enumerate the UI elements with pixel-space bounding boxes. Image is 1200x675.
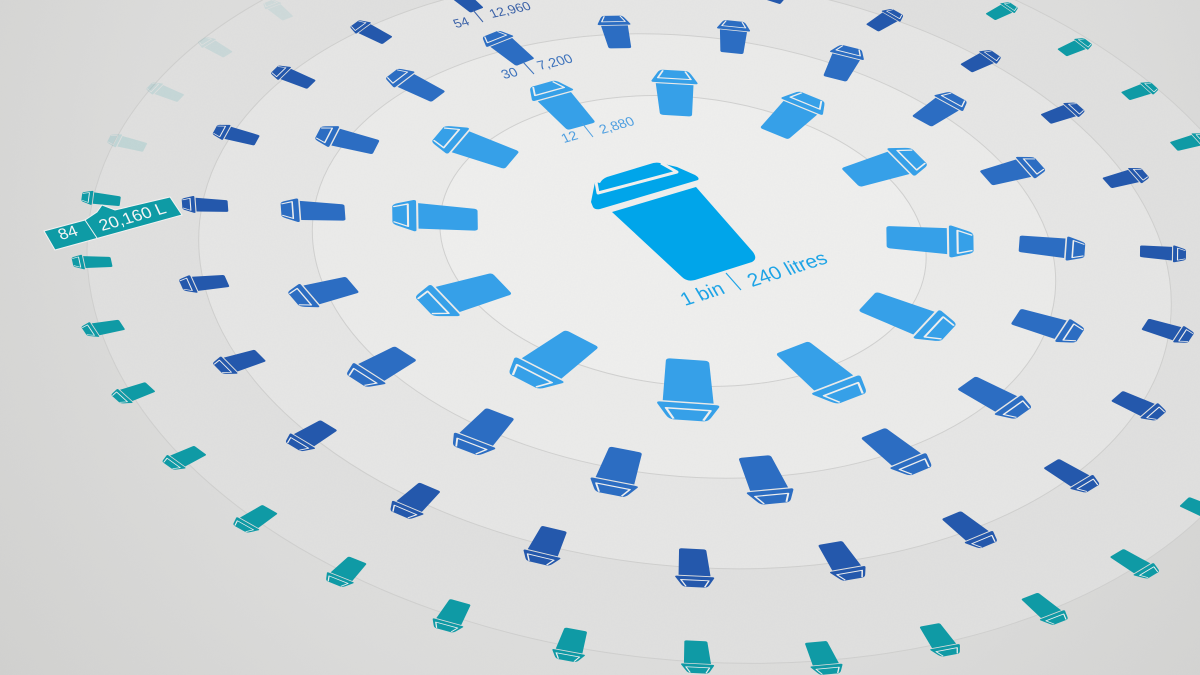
bin: [1177, 495, 1200, 525]
bin: [1008, 305, 1088, 347]
bin: [477, 28, 539, 68]
text: 12: 12: [558, 128, 580, 146]
faded bin: [106, 132, 148, 154]
text: 7,200: 7,200: [534, 51, 576, 73]
text: 240 litres: 240 litres: [743, 248, 832, 291]
bin: [409, 268, 517, 322]
bin: [1100, 165, 1152, 191]
ring 1 label: 12, 2,880: [558, 114, 637, 146]
bin: [656, 357, 720, 423]
bin: [957, 48, 1005, 74]
bin: [837, 143, 933, 191]
bin: [907, 89, 973, 129]
bin: [1055, 36, 1095, 58]
bin: [976, 153, 1050, 189]
bin: [1017, 591, 1073, 627]
text: 30: 30: [498, 65, 521, 82]
bin: [268, 63, 318, 91]
bin: [108, 380, 158, 406]
bin: [384, 480, 446, 522]
bin: [392, 199, 478, 235]
disc: ring 2: [290, 0, 1078, 514]
bin: [81, 190, 121, 208]
text: 84: 84: [55, 223, 81, 244]
bin: [762, 0, 798, 5]
divider: [523, 62, 534, 74]
central bin lid: [591, 163, 699, 209]
bin: [715, 19, 751, 55]
bin: [1140, 243, 1186, 263]
faded bin: [260, 0, 296, 22]
bin: [753, 88, 833, 142]
bin: [1108, 389, 1170, 423]
ring 2 label: 30, 7,200: [498, 51, 576, 82]
text: 54: 54: [450, 14, 472, 31]
disc: ring 3: [169, 0, 1200, 615]
bin: [863, 7, 907, 33]
bin: [71, 255, 113, 269]
divider: [582, 123, 593, 137]
bin: [347, 18, 395, 46]
central bin lid line: [596, 163, 677, 193]
bin: [159, 444, 209, 472]
bin: [953, 373, 1037, 423]
bin: [768, 338, 876, 408]
text: 2,880: 2,880: [596, 114, 637, 137]
bin: [679, 640, 715, 674]
bin: [1040, 457, 1104, 495]
bin: [673, 548, 715, 588]
bin: [550, 626, 592, 664]
bin: [209, 347, 269, 377]
bin: [281, 418, 341, 454]
bin: [522, 78, 602, 132]
divider: [85, 220, 97, 238]
bin: [818, 43, 868, 83]
bin: [313, 122, 381, 158]
bin: [587, 445, 649, 499]
bin: [499, 326, 607, 394]
central bin body: [612, 187, 755, 281]
tag shape: [44, 197, 182, 250]
bin: [229, 503, 281, 535]
bin: [596, 15, 636, 49]
bin: [443, 0, 487, 14]
bin: [280, 198, 346, 224]
bin: [855, 425, 939, 479]
bin: [886, 221, 974, 259]
bin: [800, 640, 846, 675]
central label: 1 bin, 240 litres: [676, 248, 832, 310]
faded bin: [144, 80, 186, 104]
bin: [211, 122, 261, 148]
text: 20,160 L: 20,160 L: [96, 199, 169, 235]
bin: [1018, 232, 1086, 262]
bin: [812, 540, 872, 582]
bin: [915, 622, 965, 658]
bin: [519, 524, 573, 568]
bin: [937, 509, 1003, 551]
bin: [445, 405, 521, 459]
bin: [340, 343, 422, 391]
bin: [1168, 131, 1200, 153]
divider: [726, 273, 741, 290]
bin: [1140, 316, 1196, 346]
bin: [983, 0, 1021, 22]
bin: [284, 273, 362, 311]
ring 3: dark blue bins, 54 total: [177, 0, 1196, 588]
ring 1: light blue bins, 12 total: [392, 69, 974, 423]
bin: [1107, 547, 1163, 581]
ring 4 callout tag: 84, 20,160 L: [44, 197, 182, 250]
bin: [1038, 100, 1088, 126]
ring 3 label: 54, 12,960: [450, 0, 533, 31]
bin: [427, 121, 523, 173]
text: 1 bin: 1 bin: [676, 278, 729, 310]
bin: [651, 69, 699, 117]
ring 2: mid blue bins, 30 total: [280, 15, 1088, 506]
bin: [181, 195, 229, 215]
bin: [731, 454, 799, 506]
bin: [79, 317, 127, 339]
bin: [1119, 80, 1161, 102]
bin: [854, 287, 962, 347]
divider: [473, 10, 483, 22]
bin: [177, 272, 231, 294]
bin: [428, 598, 476, 634]
bin: [381, 66, 449, 104]
central bin icon: [591, 163, 755, 281]
bin: [321, 555, 371, 589]
disc: ring 1: [425, 72, 941, 410]
faded bin: [195, 35, 235, 59]
